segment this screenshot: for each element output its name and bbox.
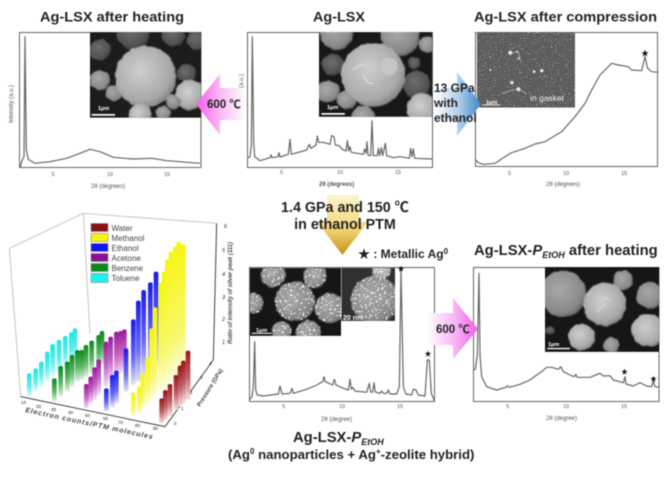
chart legend: Toluene (112, 274, 140, 283)
z-axis tick labels: 4 (222, 272, 225, 278)
SEM image: after compression (476, 32, 576, 108)
arrow: 600 °C toward left panel (196, 74, 246, 135)
series: acetone (84, 329, 127, 408)
panel: Ag-LSX-PEtOH after heating (473, 267, 665, 422)
chart legend: Methanol (112, 234, 145, 243)
x-axis tick labels: 10 (21, 400, 27, 405)
axis tick 5: 5 (282, 404, 285, 410)
x-axis label: 2θ (degree) (546, 416, 577, 422)
z-axis tick labels: 6 (224, 224, 228, 230)
axis tick 10: 10 (107, 172, 113, 178)
scale label: 1μm (256, 328, 267, 334)
label: 13 GPa with ethanol: 13 GPa (434, 81, 475, 95)
y-axis label: Intensity (a.u.) (9, 85, 15, 123)
x-axis tick labels: 60 (103, 416, 109, 421)
scale label: 1μm (548, 342, 559, 348)
caption: composition: -zeolite hybrid) (381, 447, 474, 462)
y-axis label: Pressure (GPa) (197, 368, 225, 408)
axis tick 5: 5 (508, 171, 511, 177)
SEM image: PEtOH (249, 267, 342, 337)
x-axis label: Electron counts/PTM molecules (25, 407, 153, 441)
x-axis tick labels: 50 (85, 413, 91, 418)
XRD curve: Ag-LSX (247, 37, 433, 161)
y-axis label fragment: (a.u.) (239, 74, 245, 88)
label: synthesis conditions: in ethanol PTM (294, 217, 396, 233)
pressure tick labels: 3 (200, 375, 203, 380)
label: synthesis conditions: 1.4 GPa and 150 ℃ (281, 200, 409, 216)
label: 13 GPa with ethanol: ethanol (434, 111, 477, 125)
label: 13 GPa with ethanol: with (433, 96, 458, 110)
panel: Ag-LSX after heating (9, 17, 207, 190)
SEM image: PEtOH after heating (544, 266, 660, 353)
series: ethanol (104, 272, 158, 412)
arrow: 13 GPa with ethanol (433, 72, 481, 136)
chart legend: Benzene (112, 264, 144, 273)
label: 600 °C: 600 ℃ (207, 99, 241, 111)
series: toluene (27, 328, 77, 397)
pressure tick labels: 0 (174, 421, 177, 426)
SEM image: Ag-LSX (318, 32, 433, 118)
XRD curve: after compression (475, 57, 658, 164)
series: water (159, 351, 190, 423)
star marker at 15 degrees: ★ (398, 265, 404, 273)
XRD curve: PEtOH after heating (473, 273, 659, 390)
pressure tick labels: 1 (181, 406, 184, 411)
scale label: 1μm (486, 100, 497, 106)
arrow: gold downward (317, 195, 368, 255)
z-axis tick labels: 3 (222, 295, 226, 301)
axis tick 15: 15 (395, 170, 401, 176)
axis tick 5: 5 (280, 170, 283, 176)
bar chart: 3D silver peak ratio (9, 213, 234, 441)
legend: metallic Ag: ★ : Metallic Ag (358, 247, 444, 261)
chart legend: Water (112, 224, 133, 233)
scale label: 1μm (98, 106, 109, 112)
axis tick 10: 10 (563, 171, 569, 177)
panel: Ag-LSX (239, 16, 437, 188)
x-axis tick labels: 40 (68, 410, 74, 415)
x-axis tick labels: 30 (51, 407, 57, 412)
axis tick 10: 10 (339, 404, 345, 410)
x-axis label: 2θ (degrees) (91, 184, 125, 190)
axis tick 15: 15 (621, 171, 627, 177)
legend: metallic Ag: 0 (444, 247, 449, 256)
series: benzene (52, 331, 104, 402)
x-axis tick labels: 70 (118, 420, 124, 425)
panel: Ag-LSX after compression (475, 32, 658, 188)
XRD curve: PEtOH (249, 270, 434, 401)
pressure tick labels: 4 (209, 361, 212, 366)
pressure tick labels (174, 361, 212, 426)
chart legend (91, 224, 145, 283)
label: 600 °C: 600 ℃ (436, 324, 470, 336)
panel: Ag-LSX-PEtOH (243, 260, 434, 423)
caption: Ag-LSX-PEtOH: EtOH (361, 437, 384, 447)
z-axis tick labels: 2 (221, 317, 225, 323)
title: Ag-LSX: Ag-LSX (313, 8, 366, 24)
series: methanol (131, 242, 186, 417)
axis tick 15: 15 (621, 404, 627, 410)
XRD curve: after heating (20, 37, 200, 168)
x-axis label: 2θ (degrees) (319, 182, 354, 188)
x-axis label: 2θ (degrees) (546, 182, 580, 188)
z-axis tick labels (221, 224, 228, 346)
title: Ag-LSX after compression: Ag-LSX after compression (474, 8, 657, 24)
in gasket label: in gasket (530, 93, 565, 103)
caption: composition: + (376, 447, 381, 456)
axis ticks: 5 (52, 172, 55, 178)
caption: composition: (Ag (228, 447, 250, 462)
SEM image: after heating (89, 32, 202, 119)
star marker at 17.5 degrees: ★ (650, 375, 657, 383)
x-axis label: 2θ (degree) (321, 417, 352, 423)
star marker: ★ (641, 49, 649, 58)
z-axis tick labels: 1 (222, 340, 225, 346)
axis tick 15: 15 (164, 172, 170, 178)
caption: composition: 0 (250, 447, 255, 456)
title: Ag-LSX after heating: Ag-LSX after heating (40, 8, 184, 24)
star marker at 15 degrees: ★ (621, 368, 628, 376)
chart legend: Ethanol (112, 244, 139, 253)
x-axis tick labels: 80 (135, 423, 141, 428)
inset label: 20 nm (343, 315, 363, 322)
z-axis label: Ratio of intensity of silver peak (111) (227, 242, 234, 344)
pressure tick labels: 2 (190, 390, 193, 395)
caption: Ag-LSX-PEtOH: Ag-LSX-P (293, 430, 361, 446)
x-axis tick labels: 20 (36, 404, 42, 409)
axis tick 10: 10 (563, 404, 569, 410)
axis tick 10: 10 (337, 170, 343, 176)
star marker at 17.5 degrees: ★ (424, 350, 432, 358)
axis tick 5: 5 (506, 404, 509, 410)
scale label: 1μm (327, 105, 338, 111)
title: Ag-LSX-PEtOH after heating: Ag-LSX-P (474, 243, 542, 259)
title: Ag-LSX-PEtOH after heating: EtOH (542, 250, 565, 260)
SEM inset: 20 nm (340, 267, 396, 322)
arrow: 600 °C toward right panel (427, 298, 478, 359)
x-axis tick labels (21, 400, 159, 431)
title: Ag-LSX-PEtOH after heating: after heating (565, 243, 658, 259)
chart legend: Acetone (112, 254, 141, 263)
axis tick 15: 15 (397, 404, 403, 410)
z-axis tick labels: 5 (222, 248, 226, 254)
x-axis tick labels: 90 (153, 426, 159, 431)
caption: composition: nanoparticles + Ag (254, 447, 376, 462)
